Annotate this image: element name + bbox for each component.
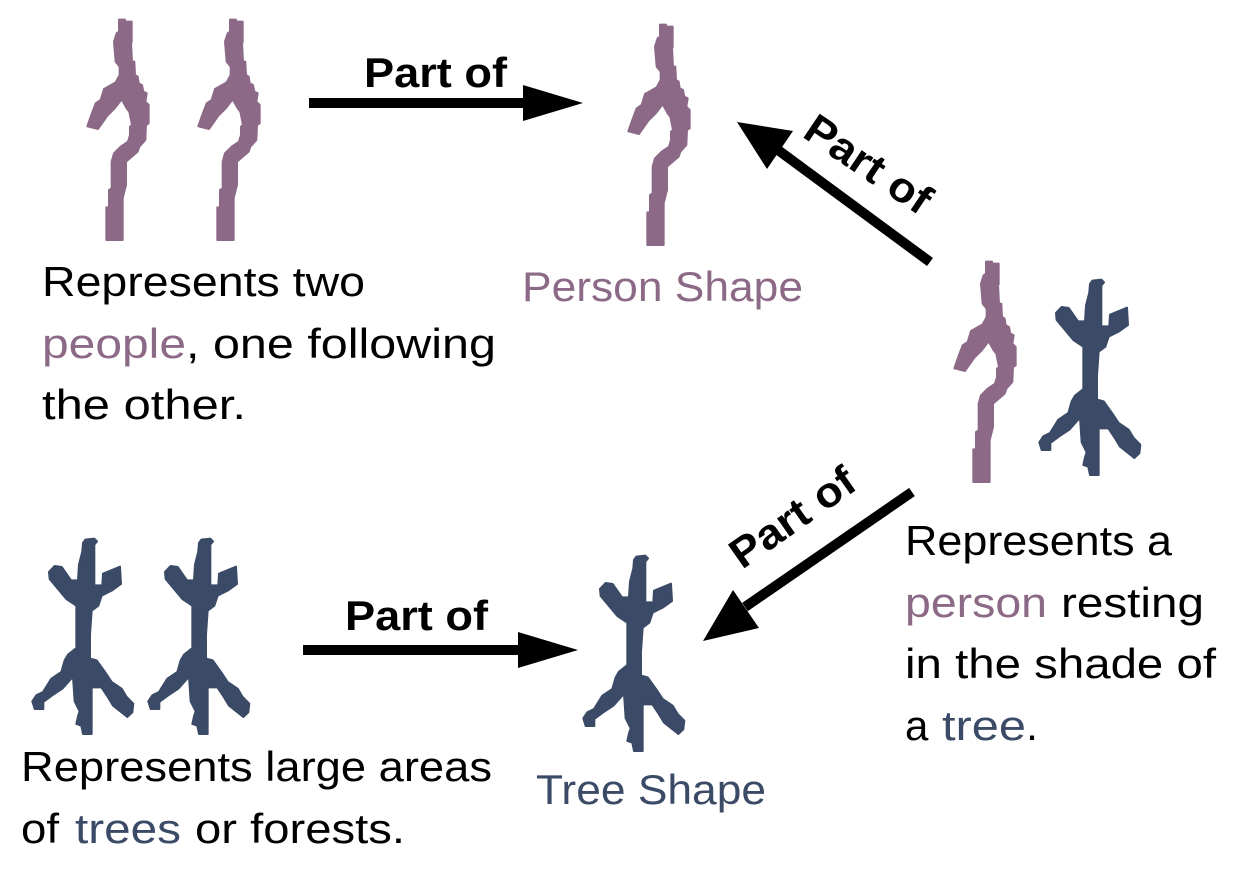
arrow: person and tree to tree shape [703,492,912,641]
text: person and tree description: a [905,702,929,749]
text: person and tree description: person [905,579,1047,626]
arrow: two trees to tree shape [303,632,578,668]
label: part of, top: Part of [364,49,508,96]
icon: two tree shapes [32,539,249,734]
icon: person shape [628,25,690,245]
heading: person shape: Person Shape [522,263,803,310]
arrow: person and tree to person shape [737,122,930,262]
label: part of, bottom: Part of [345,592,489,639]
text: trees description: trees [75,805,181,852]
label: part of, lower diagonal: Part of [720,456,865,577]
text: two people description: , one following [186,320,496,367]
arrow: two people to person shape [309,85,583,121]
text: trees description: or forests. [195,805,405,852]
label: part of, upper diagonal: Part of [796,104,942,224]
text: person and tree description: tree [942,702,1026,749]
heading: tree shape: Tree Shape [536,766,766,813]
text: person and tree description: . [1026,702,1038,749]
text: two people description: the other. [42,381,246,428]
icon: two person shapes [87,20,260,240]
text: two people description: people [42,320,186,367]
icon: person and tree shapes [954,262,1140,482]
text: trees description: of [21,805,59,852]
text: person and tree description: Represents a [905,517,1173,564]
text: person and tree description: resting [1061,579,1204,626]
icon: tree shape [583,556,684,751]
text: trees description: Represents large areas [21,743,492,790]
text: two people description: Represents two [42,258,365,305]
text: person and tree description: in the shade of [905,640,1216,687]
